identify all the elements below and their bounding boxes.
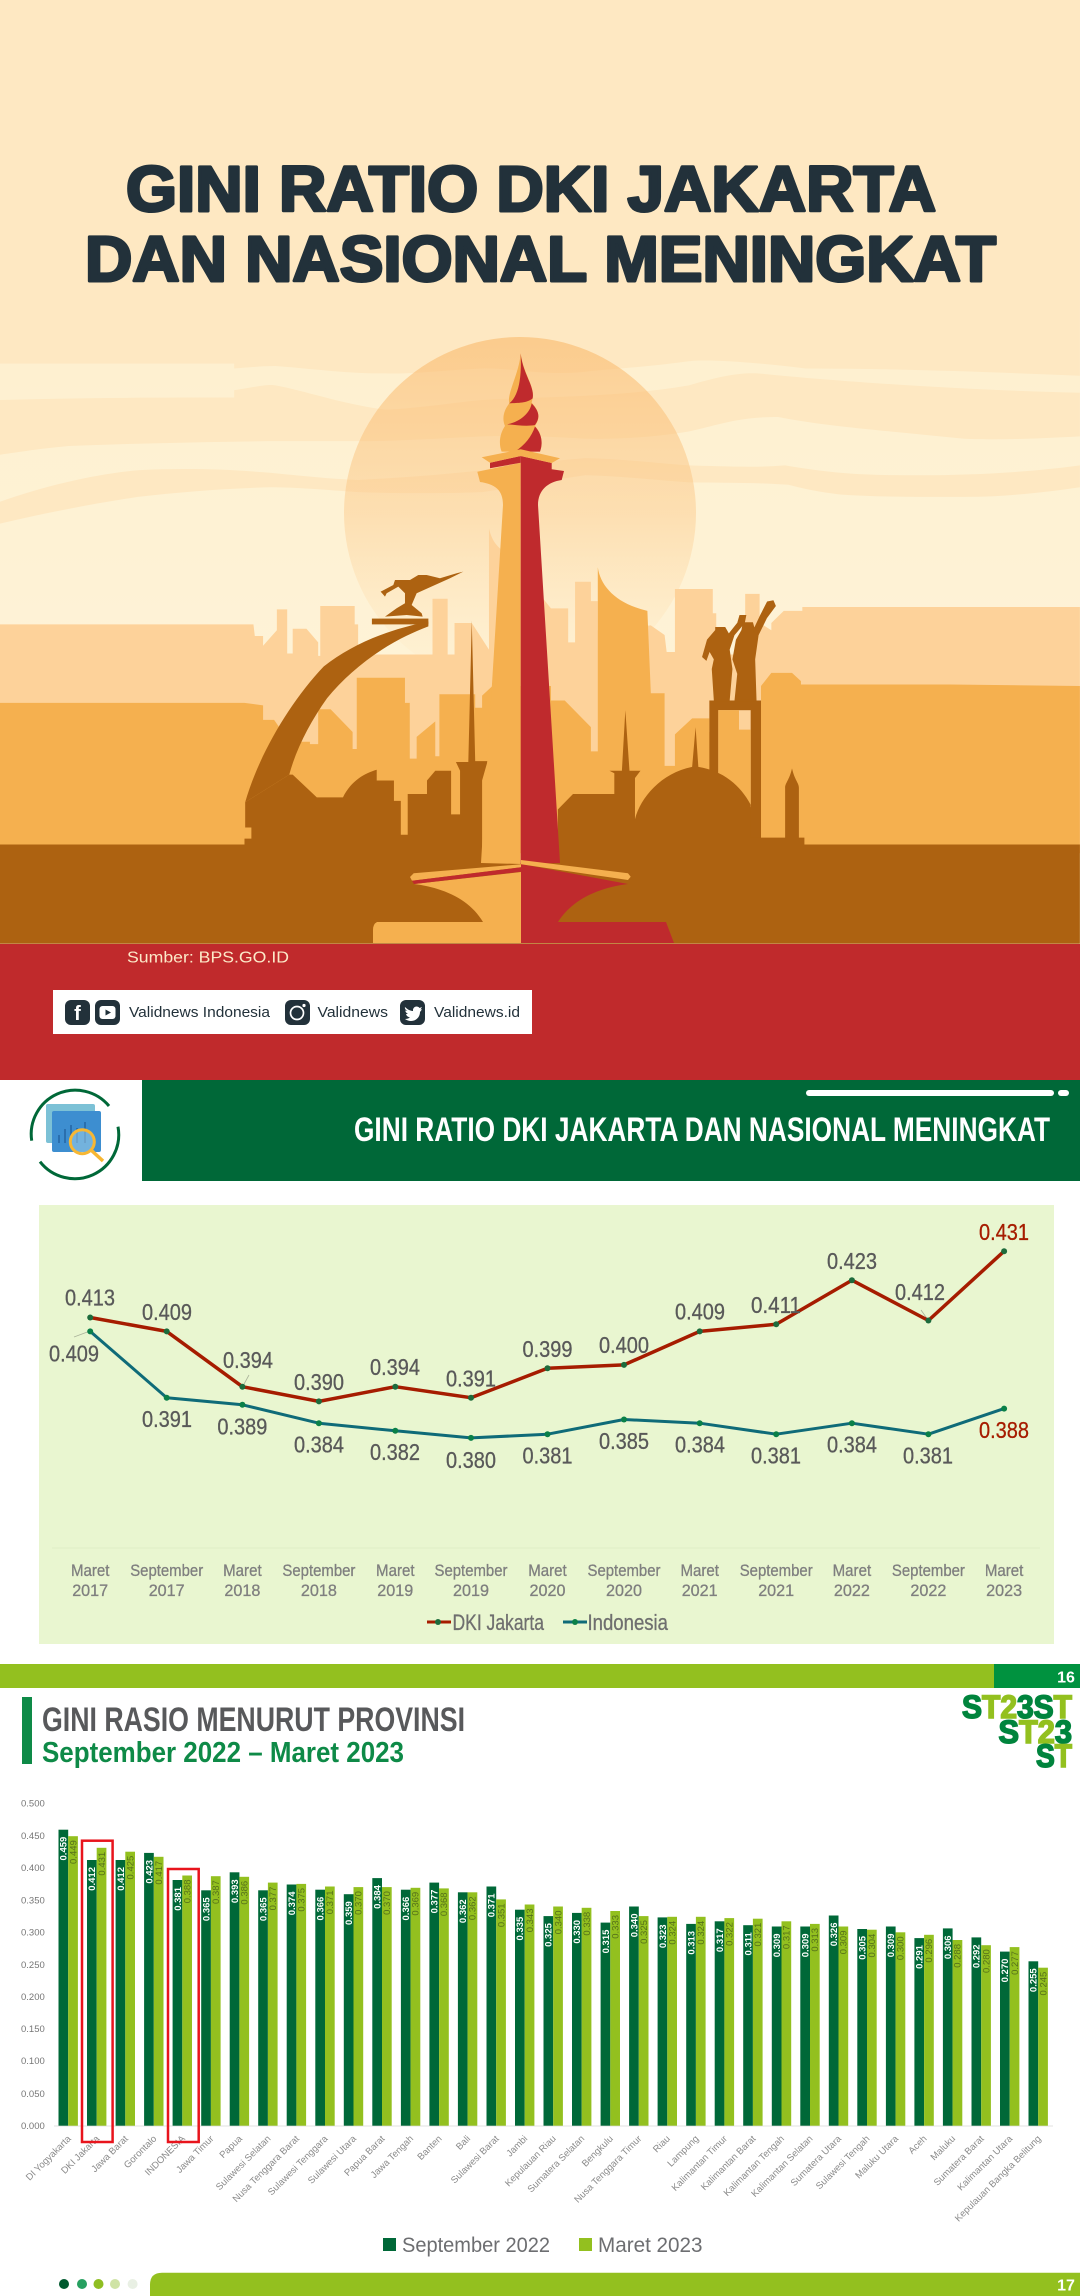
data labels: DKI Jakarta: 0.394 [370, 1354, 420, 1380]
flying figure [381, 572, 463, 617]
bars: Bengkulu: Bengkulu [580, 2134, 616, 2169]
social media bar [53, 990, 532, 1034]
bars: Maluku: Maluku [929, 2134, 958, 2163]
data labels: Indonesia: 0.382 [370, 1439, 420, 1465]
sky [0, 0, 1080, 944]
series: Indonesia [87, 1328, 1007, 1441]
bars: Sulawesi Tengah [814, 1929, 878, 2192]
text: Validnews.id: Validnews.id [434, 1005, 520, 1021]
bars: Nusa Tenggara Timur: 0.325 [639, 1920, 650, 1944]
bars: DI Yogyakarta: DI Yogyakarta [24, 2133, 74, 2183]
title: GINI RATIO DKI JAKARTA [126, 153, 936, 225]
bars: Riau: Riau [651, 2134, 673, 2155]
bars: Jawa Tengah: Jawa Tengah [369, 2134, 416, 2181]
logo: ST2023 [962, 1689, 1072, 1774]
bars: Kalimantan Tengah: Kalimantan Tengah [722, 2134, 787, 2199]
monument base [373, 860, 674, 943]
bars: Sulawesi Tengah: Sulawesi Tengah [814, 2134, 872, 2192]
bars: Sulawesi Tengah: 0.304 [867, 1934, 878, 1957]
bar chart: y axis labels: 0.250 [21, 1960, 45, 1971]
data labels: DKI Jakarta: 0.399 [522, 1336, 572, 1362]
bars: Riau: 0.323 [658, 1924, 669, 1948]
data labels: DKI Jakarta: 0.411 [751, 1292, 801, 1318]
slide bar 16 [0, 1664, 1080, 1688]
bars: Sulawesi Barat: Sulawesi Barat [449, 2133, 502, 2186]
bars: Jawa Barat: 0.412 [116, 1867, 127, 1891]
bars: Kalimantan Utara: 0.277 [1010, 1951, 1021, 1975]
bars: Kepulauan Bangka Belitung [953, 1961, 1049, 2224]
bars: Papua: 0.393 [230, 1879, 241, 1903]
x axis labels: Maret [223, 1561, 262, 1580]
bars: Riau [651, 1917, 678, 2155]
data labels: Indonesia: 0.381 [903, 1443, 953, 1469]
data labels: DKI Jakarta: 0.391 [446, 1366, 496, 1392]
logo: ST2023: ST23ST [962, 1689, 1072, 1725]
bars: Kalimantan Selatan [749, 1924, 821, 2200]
text: Validnews: Validnews [318, 1005, 388, 1021]
bars: Gorontalo: 0.417 [154, 1861, 165, 1885]
panel: section 2 header [142, 1080, 1080, 1181]
bars: Bali: 0.362 [458, 1899, 469, 1923]
bars: Kepulauan Riau: 0.340 [553, 1910, 564, 1934]
x axis labels [71, 1561, 1024, 1600]
bars: Jambi: Jambi [504, 2134, 530, 2159]
x axis labels: Maret [833, 1561, 871, 1580]
bars: Nusa Tenggara Barat: 0.375 [297, 1888, 308, 1912]
bars: Maluku: 0.306 [943, 1935, 954, 1959]
bars: Papua Barat: 0.384 [372, 1884, 383, 1909]
bars: Lampung: Lampung [666, 2134, 701, 2169]
data labels: Indonesia: 0.389 [217, 1414, 267, 1440]
bars: Jawa Barat: Jawa Barat [89, 2133, 131, 2175]
data labels: Indonesia: 0.381 [751, 1443, 801, 1469]
series: DKI Jakarta [87, 1248, 1007, 1404]
bars: Sumatera Selatan: 0.338 [582, 1912, 593, 1936]
bars: INDONESIA: INDONESIA [143, 2133, 188, 2178]
x axis labels: Maret [528, 1561, 567, 1580]
title: DAN NASIONAL MENINGKAT [85, 223, 996, 295]
bars: Kalimantan Timur [670, 1918, 736, 2194]
data labels: DKI Jakarta [65, 1219, 1029, 1395]
x axis labels: September [588, 1561, 661, 1580]
panel: poster illustration [0, 0, 1080, 1080]
icon: facebook: f [74, 1003, 81, 1025]
data labels: Indonesia: 0.384 [675, 1432, 725, 1458]
leader lines [74, 1310, 928, 1387]
bars: DI Yogyakarta [24, 1830, 79, 2183]
bars: Bali: 0.362 [468, 1896, 479, 1920]
data labels: Indonesia: 0.384 [827, 1432, 877, 1458]
bars: Maluku: 0.288 [953, 1944, 964, 1968]
bars: DI Yogyakarta: 0.449 [68, 1840, 79, 1864]
logo: ST2023: ST23 [998, 1714, 1072, 1750]
x axis labels: 2019 [453, 1581, 489, 1600]
legend [427, 1610, 669, 1635]
bars: Jawa Barat [89, 1852, 136, 2175]
bars: Gorontalo: Gorontalo [122, 2134, 159, 2171]
bars: Nusa Tenggara Timur: 0.340 [629, 1913, 640, 1937]
legend: DKI Jakarta [452, 1610, 545, 1635]
bars: Sulawesi Tenggara [266, 1886, 336, 2198]
bars: Papua Barat: 0.370 [382, 1891, 393, 1915]
bars: Jawa Barat: 0.425 [125, 1856, 136, 1879]
bars: Bengkulu: 0.333 [610, 1915, 621, 1939]
bars: Banten: 0.377 [430, 1890, 441, 1913]
bars: Sulawesi Utara: 0.359 [344, 1901, 355, 1925]
icon: youtube [95, 1000, 120, 1025]
bars: Nusa Tenggara Barat: 0.374 [287, 1891, 298, 1915]
bars: Nusa Tenggara Timur [572, 1906, 650, 2205]
bars: Sumatera Utara [789, 1916, 850, 2189]
data labels: DKI Jakarta: 0.409 [675, 1298, 725, 1324]
bars: Riau: 0.324 [667, 1921, 678, 1945]
bars: Kalimantan Timur: 0.317 [715, 1928, 726, 1952]
bars: Sulawesi Utara [306, 1887, 365, 2186]
bars: Banten: 0.368 [439, 1892, 450, 1916]
bars: Nusa Tenggara Barat [231, 1884, 308, 2205]
bars: Kepulauan Riau: 0.325 [544, 1922, 555, 1947]
bars: Nusa Tenggara Barat: Nusa Tenggara Barat [231, 2133, 302, 2205]
legend: Indonesia [588, 1610, 669, 1635]
monument flame [500, 353, 542, 452]
bars: INDONESIA: 0.381 [173, 1886, 184, 1911]
bars: Sumatera Selatan: 0.330 [572, 1920, 583, 1944]
bars: Kepulauan Riau [503, 1906, 564, 2189]
x axis labels: 2017 [72, 1581, 108, 1600]
skyline: middle layer [0, 567, 1080, 853]
bars: Jambi [504, 1904, 536, 2159]
bars: DKI Jakarta [59, 1848, 108, 2176]
bars: INDONESIA: 0.388 [182, 1879, 193, 1903]
bars: Kalimantan Barat: Kalimantan Barat [699, 2133, 759, 2193]
logo: ST2023: ST [1036, 1738, 1072, 1774]
x axis labels: 2020 [606, 1581, 642, 1600]
bars: DKI Jakarta: DKI Jakarta [59, 2133, 103, 2176]
bars: Sumatera Utara: 0.309 [839, 1930, 850, 1954]
bar chart: y axis labels: 0.200 [21, 1992, 45, 2003]
bars: Kalimantan Timur: Kalimantan Timur [670, 2134, 730, 2194]
bars: Sumatera Barat [932, 1937, 992, 2188]
x axis labels: 2019 [377, 1581, 413, 1600]
bars: Jambi: 0.335 [515, 1916, 526, 1940]
bars: Maluku Utara: 0.309 [886, 1933, 897, 1957]
bars: Gorontalo: 0.423 [144, 1860, 155, 1884]
bar chart: y axis labels: 0.350 [21, 1895, 45, 1906]
bars: Jawa Tengah [369, 1888, 422, 2181]
bar chart legend: September 2022 [402, 2234, 550, 2257]
monument shaft [477, 449, 564, 864]
bars: Papua: Papua [218, 2133, 245, 2161]
highlight box: DKI Jakarta [82, 1841, 113, 2142]
bars: Kalimantan Barat [699, 1919, 764, 2193]
bars: Sulawesi Selatan [214, 1883, 279, 2193]
bars: Jawa Timur: 0.387 [211, 1880, 222, 1904]
bars: Jawa Timur: 0.365 [201, 1897, 212, 1921]
x axis labels: September [892, 1561, 965, 1580]
slide bar 16: 16 [1057, 1670, 1075, 1686]
x axis labels: 2018 [224, 1581, 260, 1600]
bars: Maluku [929, 1928, 964, 2163]
bars: Banten [415, 1883, 450, 2163]
x axis labels: 2021 [758, 1581, 794, 1600]
bars: Sulawesi Tenggara: Sulawesi Tenggara [266, 2133, 331, 2198]
bars: DKI Jakarta: 0.431 [97, 1852, 108, 1876]
bar chart: y axis labels [21, 1799, 45, 2132]
bars: Jawa Tengah: 0.369 [411, 1892, 422, 1916]
bars: Maluku Utara: Maluku Utara [853, 2133, 902, 2181]
data labels: Indonesia: 0.385 [599, 1428, 649, 1454]
bar chart: y axis labels: 0.500 [21, 1799, 45, 1810]
bars: Kalimantan Utara: 0.270 [1000, 1959, 1011, 1982]
x axis labels: Maret [985, 1561, 1024, 1580]
x axis labels: September [434, 1561, 508, 1580]
bars: Kalimantan Tengah: 0.317 [782, 1925, 793, 1949]
data labels: DKI Jakarta: 0.390 [294, 1369, 344, 1395]
x axis labels: 2018 [301, 1581, 337, 1600]
bars: Lampung: 0.324 [696, 1921, 707, 1945]
bars: Banten: Banten [415, 2134, 445, 2163]
bars: Kalimantan Timur: 0.322 [725, 1922, 736, 1946]
bars: INDONESIA [143, 1876, 193, 2178]
heading: Gini rasio menurut provinsi: GINI RASIO MENURUT PROVINSI [42, 1701, 465, 1739]
footer bar 17: 17 [1057, 2278, 1075, 2294]
statue frame [709, 700, 761, 839]
bars: Sulawesi Barat: 0.351 [496, 1903, 507, 1927]
bars: Aceh: 0.291 [915, 1944, 926, 1969]
bars: Sumatera Utara: 0.326 [829, 1922, 840, 1946]
data labels: DKI Jakarta: 0.409 [142, 1299, 192, 1325]
bar chart: y axis labels: 0.100 [21, 2056, 45, 2067]
x axis labels: September [282, 1561, 356, 1580]
bars: Sumatera Selatan: Sumatera Selatan [526, 2134, 587, 2195]
bars: Maluku Utara [853, 1926, 907, 2181]
bar chart legend: Maret 2023 [598, 2234, 702, 2257]
bars: Bengkulu: 0.315 [601, 1929, 612, 1953]
bars: Kalimantan Selatan: 0.313 [810, 1928, 821, 1952]
bars: Sulawesi Tengah: 0.305 [857, 1935, 868, 1960]
data labels: DKI Jakarta: 0.413 [65, 1284, 115, 1310]
data labels: DKI Jakarta: 0.431 [979, 1219, 1029, 1245]
bars: Kepulauan Riau: Kepulauan Riau [503, 2134, 559, 2189]
bars: Jawa Timur [174, 1876, 222, 2176]
data labels: Indonesia: 0.391 [142, 1406, 192, 1432]
x axis labels: Maret [680, 1561, 719, 1580]
bars: Kalimantan Utara [955, 1947, 1021, 2193]
bars: Kepulauan Bangka Belitung: 0.255 [1029, 1968, 1040, 1992]
bar chart: y axis labels: 0.150 [21, 2024, 45, 2035]
bars: Gorontalo [122, 1853, 165, 2171]
bar chart: y axis labels: 0.300 [21, 1928, 45, 1938]
data labels: Indonesia: 0.409 [49, 1341, 99, 1367]
x axis labels: September [130, 1561, 203, 1580]
text: Validnews Indonesia: Validnews Indonesia [129, 1005, 271, 1021]
bars: Jambi: 0.343 [525, 1908, 536, 1932]
bars: DI Yogyakarta: 0.459 [59, 1837, 70, 1860]
x axis labels: 2017 [149, 1581, 185, 1600]
bars: DKI Jakarta: 0.412 [87, 1867, 98, 1891]
bars: Aceh [906, 1935, 935, 2157]
bar chart: y axis labels: 0.050 [21, 2089, 45, 2100]
title [85, 153, 996, 295]
bars: Bali [454, 1892, 479, 2153]
bars: Sulawesi Utara: Sulawesi Utara [306, 2133, 359, 2186]
data labels: Indonesia: 0.381 [522, 1443, 572, 1469]
source note: Sumber: BPS.GO.ID [127, 950, 289, 966]
red footer band [0, 944, 1080, 1080]
bars: Kalimantan Selatan: 0.309 [800, 1933, 811, 1957]
data labels: Indonesia: 0.380 [446, 1447, 496, 1473]
bars: Jawa Tengah: 0.366 [401, 1897, 412, 1920]
bars: Kepulauan Bangka Belitung: 0.245 [1038, 1972, 1049, 1995]
x axis labels: 2022 [910, 1581, 946, 1600]
bars: Papua Barat: Papua Barat [342, 2133, 388, 2179]
bar chart: y axis labels: 0.450 [21, 1831, 45, 1842]
bars: Kalimantan Tengah [722, 1921, 793, 2199]
bars: Kalimantan Barat: 0.311 [743, 1931, 754, 1955]
data labels: DKI Jakarta: 0.412 [895, 1279, 945, 1305]
bars: Lampung [666, 1917, 707, 2169]
cloud bands [0, 0, 1080, 524]
bar chart legend [383, 2234, 702, 2257]
bars: Bengkulu [580, 1911, 621, 2169]
x axis labels: September [740, 1561, 813, 1580]
x axis labels: Maret [71, 1561, 110, 1580]
bars: Sulawesi Barat: 0.371 [487, 1893, 498, 1917]
bars: Sulawesi Selatan: 0.377 [268, 1887, 279, 1910]
bars: Jawa Timur: Jawa Timur [174, 2134, 216, 2176]
bars: Aceh: 0.296 [924, 1939, 935, 1963]
bars: Sumatera Utara: Sumatera Utara [789, 2133, 844, 2189]
bars: Sulawesi Selatan: Sulawesi Selatan [214, 2134, 273, 2193]
bars: Sumatera Barat: 0.280 [981, 1949, 992, 1973]
bars: Sumatera Barat: 0.292 [972, 1944, 983, 1968]
bar chart: provinces [24, 1830, 1053, 2224]
skyline: foreground brown layer [0, 621, 1080, 944]
bars: Papua [218, 1872, 250, 2161]
icon: twitter [400, 1000, 425, 1025]
data labels: DKI Jakarta: 0.423 [827, 1248, 877, 1274]
heading: Gini rasio menurut provinsi [22, 1697, 465, 1769]
bars: Aceh: Aceh [906, 2134, 930, 2157]
bars: Sulawesi Tenggara: 0.366 [315, 1897, 326, 1920]
data labels: Indonesia: 0.388 [979, 1417, 1029, 1443]
bars: Papua Barat [342, 1878, 393, 2179]
data labels: Indonesia: 0.384 [294, 1432, 344, 1458]
panel: line chart [39, 1205, 1054, 1644]
bars: Sumatera Barat: Sumatera Barat [932, 2133, 987, 2188]
data labels: Indonesia [49, 1341, 1029, 1473]
bars: Kepulauan Bangka Belitung: Kepulauan Bangka Belitung [953, 2134, 1044, 2224]
bars: Kalimantan Utara: Kalimantan Utara [955, 2133, 1016, 2193]
bars: Nusa Tenggara Timur: Nusa Tenggara Timur [572, 2134, 644, 2205]
bars: Sulawesi Tenggara: 0.371 [325, 1890, 336, 1914]
skyline: far layer [0, 528, 1080, 944]
bars: Kalimantan Selatan: Kalimantan Selatan [749, 2134, 815, 2200]
x axis labels: Maret [376, 1561, 415, 1580]
icon: analytics magnifier [31, 1090, 119, 1179]
arch of the Dirgantara statue [245, 601, 775, 802]
bars: Maluku Utara: 0.300 [896, 1936, 907, 1960]
x axis labels: 2022 [834, 1581, 870, 1600]
bars: Bali: Bali [454, 2134, 473, 2153]
bars: Lampung: 0.313 [686, 1931, 697, 1955]
data labels: DKI Jakarta: 0.400 [599, 1332, 649, 1358]
x axis labels: 2021 [682, 1581, 718, 1600]
highlight box: Indonesia [168, 1869, 199, 2142]
icon: facebook [65, 1000, 90, 1025]
footer bar 17 [150, 2273, 1080, 2296]
bars: Papua: 0.386 [239, 1881, 250, 1905]
icon: instagram [285, 1000, 310, 1025]
bars: Sulawesi Selatan: 0.365 [258, 1897, 269, 1921]
bars: Sulawesi Utara: 0.370 [354, 1891, 365, 1915]
bars: Sulawesi Barat [449, 1886, 507, 2186]
bars: Sumatera Selatan [526, 1908, 593, 2195]
bar chart: y axis labels: 0.000 [21, 2121, 45, 2132]
bars: Kalimantan Tengah: 0.309 [772, 1933, 783, 1957]
footer dots [59, 2279, 138, 2289]
data labels: DKI Jakarta: 0.394 [223, 1347, 273, 1373]
x axis labels: 2020 [530, 1581, 566, 1600]
sun [344, 337, 696, 689]
x axis labels: 2023 [986, 1581, 1022, 1600]
bars: Kalimantan Barat: 0.321 [753, 1923, 764, 1946]
bar chart: y axis labels: 0.400 [21, 1863, 45, 1874]
heading: Gini rasio menurut provinsi: September 2022 – Maret 2023 [42, 1737, 404, 1769]
